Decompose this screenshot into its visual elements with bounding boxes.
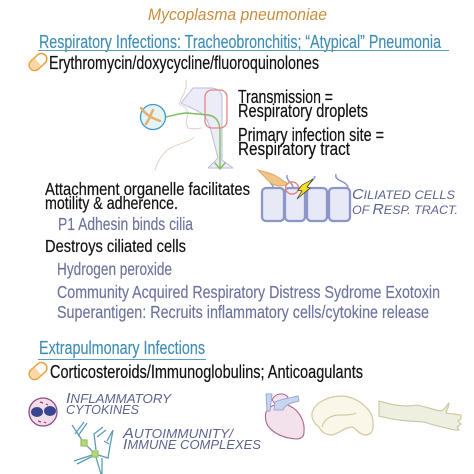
- label: autoimmunity: AUTOIMMUNITY/: [122, 425, 235, 442]
- pathogenesis text: P1 Adhesin binds cilia: [58, 214, 193, 234]
- icon: brain: [312, 396, 373, 435]
- icon: droplet: [140, 104, 166, 130]
- pathogenesis text: Destroys ciliated cells: [45, 236, 186, 256]
- primary infection site note: [238, 125, 384, 159]
- icon: pill: [27, 51, 49, 73]
- attachment ring: [286, 182, 298, 194]
- icon: inflammatory cell: [29, 398, 57, 426]
- icon: lightning: [297, 179, 313, 199]
- treatment: respiratory: Erythromycin/doxycycline/fluoroquinolones: [49, 53, 319, 73]
- icon: pill: [27, 360, 49, 382]
- infection path: [166, 113, 225, 169]
- icon: heart: [265, 394, 304, 439]
- label: inflammatory cytokines: CYTOKINES: [66, 403, 140, 417]
- primary infection site note: Primary infection site =: [238, 125, 384, 145]
- icon: immune complexes: [72, 422, 113, 474]
- nasal cavity and airway: [181, 88, 233, 168]
- heading: extrapulmonary infections: Extrapulmonary Infections: [39, 338, 205, 358]
- diagram: ciliated cells: [258, 170, 350, 221]
- site outline: [205, 90, 227, 128]
- pathogenesis text: motility & adherence.: [45, 193, 178, 213]
- cell label: OF RESP. TRACT.: [352, 201, 458, 218]
- transmission note: [238, 87, 368, 121]
- treatment: extrapulmonary: Corticosteroids/Immunoglobulins; Anticoagulants: [50, 362, 363, 382]
- diagram: airway transmission: [140, 80, 233, 170]
- title: Mycoplasma pneumoniae: [148, 6, 327, 24]
- mycoplasma organism: [258, 170, 288, 186]
- cell label: [352, 186, 458, 218]
- cells: [262, 188, 350, 221]
- primary infection site note: Respiratory tract: [238, 139, 350, 159]
- label: inflammatory cytokines: INFLAMMATORY: [66, 390, 173, 407]
- pathogenesis text: Hydrogen peroxide: [57, 259, 172, 279]
- pathogenesis text: [45, 179, 440, 322]
- pathogenesis text: Attachment organelle facilitates: [45, 179, 250, 199]
- icon: arm: [379, 401, 461, 430]
- label: autoimmunity: [122, 425, 262, 453]
- label: inflammatory cytokines: [66, 390, 173, 417]
- transmission note: Transmission =: [238, 87, 333, 107]
- cilia: [270, 174, 348, 188]
- transmission note: Respiratory droplets: [238, 101, 368, 121]
- head profile: [155, 80, 201, 170]
- label: autoimmunity: IMMUNE COMPLEXES: [123, 436, 262, 453]
- cell label: CILIATED CELLS: [352, 186, 455, 203]
